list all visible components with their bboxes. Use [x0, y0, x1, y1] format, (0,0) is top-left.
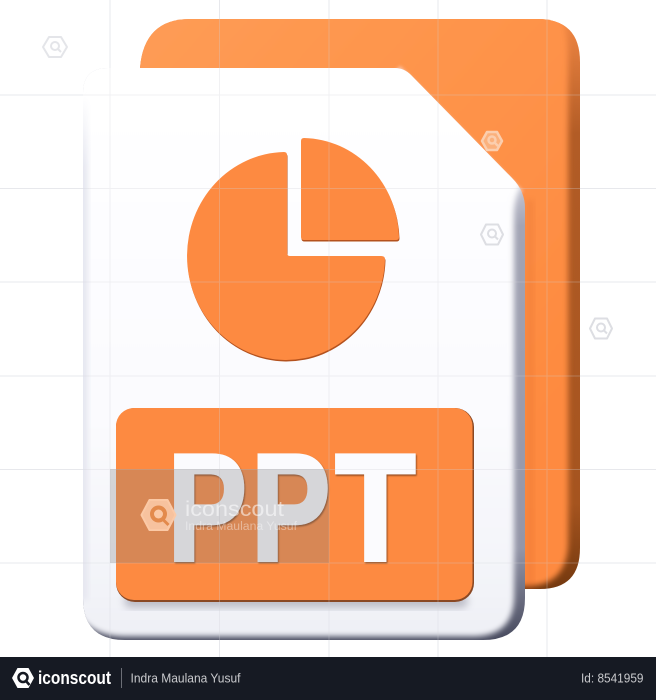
- footer divider: [121, 668, 122, 688]
- pie chart icon: [187, 138, 400, 361]
- grid lines over artwork: [83, 19, 580, 640]
- back folder sheet: [120, 0, 580, 600]
- PPT text: T: [335, 424, 415, 593]
- footer bar: [0, 657, 656, 700]
- white document page: [83, 68, 525, 640]
- watermark: central text: Indra Maulana Yusuf: [185, 521, 298, 533]
- footer logo icon: [12, 668, 34, 688]
- watermark: logo on page: [481, 224, 503, 244]
- footer author: Indra Maulana Yusuf: [130, 670, 241, 686]
- footer id: Id: 8541959: [581, 670, 644, 686]
- PPT label badge: [116, 408, 474, 602]
- PPT text: PP: [168, 423, 330, 592]
- PPT text: [168, 423, 415, 593]
- quarter pie slice: [301, 138, 400, 242]
- watermark: central logo: [142, 500, 176, 530]
- watermark: central text: [185, 498, 298, 533]
- watermark: logo at right: [590, 318, 612, 338]
- shadow below label badge: [124, 594, 468, 608]
- footer brand name: iconscout: [38, 668, 111, 688]
- watermark: logo on folder: [482, 132, 502, 150]
- main pie slice: [187, 152, 386, 361]
- watermark: central text: iconscout: [185, 498, 284, 521]
- watermark: translucent panel: [110, 469, 329, 563]
- watermark: small logo top left: [43, 37, 67, 57]
